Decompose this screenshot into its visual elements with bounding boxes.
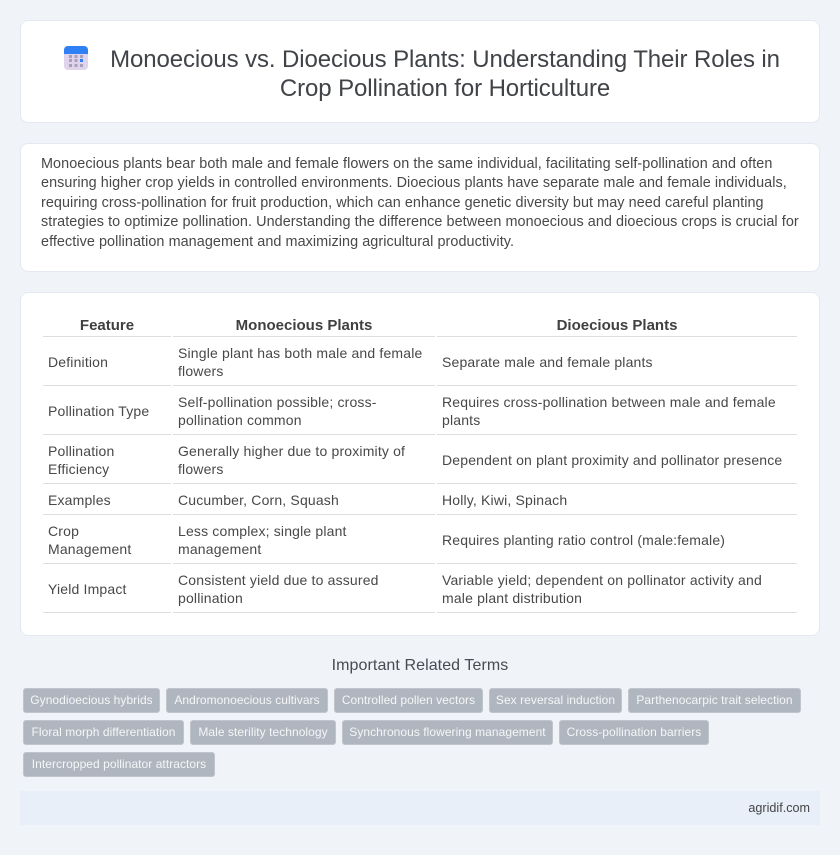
row: definition: flowers	[178, 363, 224, 379]
row: yield impact: male plant distribution	[442, 590, 582, 606]
row: pollination type: Self-pollination possible; cross-	[178, 394, 377, 410]
row: definition: Separate male and female plants	[442, 354, 653, 370]
row: yield impact: pollination	[178, 590, 243, 606]
row: pollination type	[48, 394, 776, 428]
related term tags: Andromonoecious cultivars	[174, 693, 320, 707]
row: examples: Holly, Kiwi, Spinach	[442, 492, 567, 508]
related term tags: Gynodioecious hybrids	[30, 693, 153, 707]
row: pollination type: Requires cross-pollination between male and female	[442, 394, 776, 410]
description text: Monoecious plants bear both male and female flowers on the same individual, facilitating self-pollination and often	[41, 156, 772, 172]
row: pollination type: Pollination Type	[48, 403, 149, 419]
related term tags: Floral morph differentiation	[32, 725, 175, 739]
row: yield impact: Yield Impact	[48, 581, 127, 597]
footer source text: agridif.com	[748, 801, 810, 815]
description text: strategies to optimize pollination. Understanding the difference between monoecious and dioecious crops is crucial for	[41, 214, 799, 230]
row: pollination efficiency	[48, 443, 782, 477]
footer bar	[20, 791, 820, 825]
row: crop management: Less complex; single plant	[178, 523, 347, 539]
column headers: Dioecious Plants	[557, 317, 677, 334]
related term tags: Parthenocarpic trait selection	[636, 693, 793, 707]
heading: important related terms: Important Related Terms	[332, 657, 508, 674]
row: crop management: Management	[48, 541, 131, 557]
related term tags: Cross-pollination barriers	[567, 725, 701, 739]
title: Monoecious vs. Dioecious Plants: Understanding Their Roles in	[110, 46, 780, 73]
row: crop management: management	[178, 541, 261, 557]
row: definition	[48, 345, 653, 379]
description text: effective pollination management and maximizing agricultural productivity.	[41, 234, 514, 250]
row: yield impact	[48, 572, 762, 606]
header panel	[20, 20, 820, 123]
row: yield impact: Consistent yield due to assured	[178, 572, 379, 588]
row: examples: Cucumber, Corn, Squash	[178, 492, 339, 508]
row: crop management	[48, 523, 725, 557]
description text: requiring cross-pollination for fruit production, which can enhance genetic diversity but may need careful planting	[41, 195, 764, 211]
row: pollination efficiency: flowers	[178, 461, 224, 477]
description text: ensuring higher crop yields in controlled environments. Dioecious plants have separate male and female individuals,	[41, 175, 787, 191]
column headers: Monoecious Plants	[236, 317, 372, 334]
row: examples: Examples	[48, 492, 111, 508]
row: pollination efficiency: Efficiency	[48, 461, 109, 477]
row: pollination efficiency: Dependent on plant proximity and pollinator presence	[442, 452, 782, 468]
related term tags: Intercropped pollinator attractors	[32, 757, 206, 771]
title: Crop Pollination for Horticulture	[280, 75, 610, 102]
related term tags: Sex reversal induction	[496, 693, 615, 707]
row: pollination type: plants	[442, 412, 480, 428]
row: pollination efficiency: Generally higher due to proximity of	[178, 443, 405, 459]
description text	[41, 156, 799, 250]
column headers: Feature	[80, 317, 134, 334]
panel: description	[20, 143, 820, 272]
icon: calendar	[64, 46, 88, 70]
panel: comparison table	[20, 292, 820, 636]
row: examples	[48, 492, 567, 508]
row: pollination efficiency: Pollination	[48, 443, 114, 459]
row: yield impact: Variable yield; dependent on pollinator activity and	[442, 572, 762, 588]
title	[110, 46, 780, 102]
row: crop management: Crop	[48, 523, 79, 539]
row: definition: Definition	[48, 354, 108, 370]
row: crop management: Requires planting ratio control (male:female)	[442, 532, 725, 548]
row: pollination type: pollination common	[178, 412, 302, 428]
row: definition: Single plant has both male and female	[178, 345, 422, 361]
related term tags: Synchronous flowering management	[349, 725, 546, 739]
column headers	[80, 317, 677, 334]
related term tags: Controlled pollen vectors	[342, 693, 475, 707]
related term tags	[23, 688, 801, 777]
related term tags: Male sterility technology	[198, 725, 328, 739]
